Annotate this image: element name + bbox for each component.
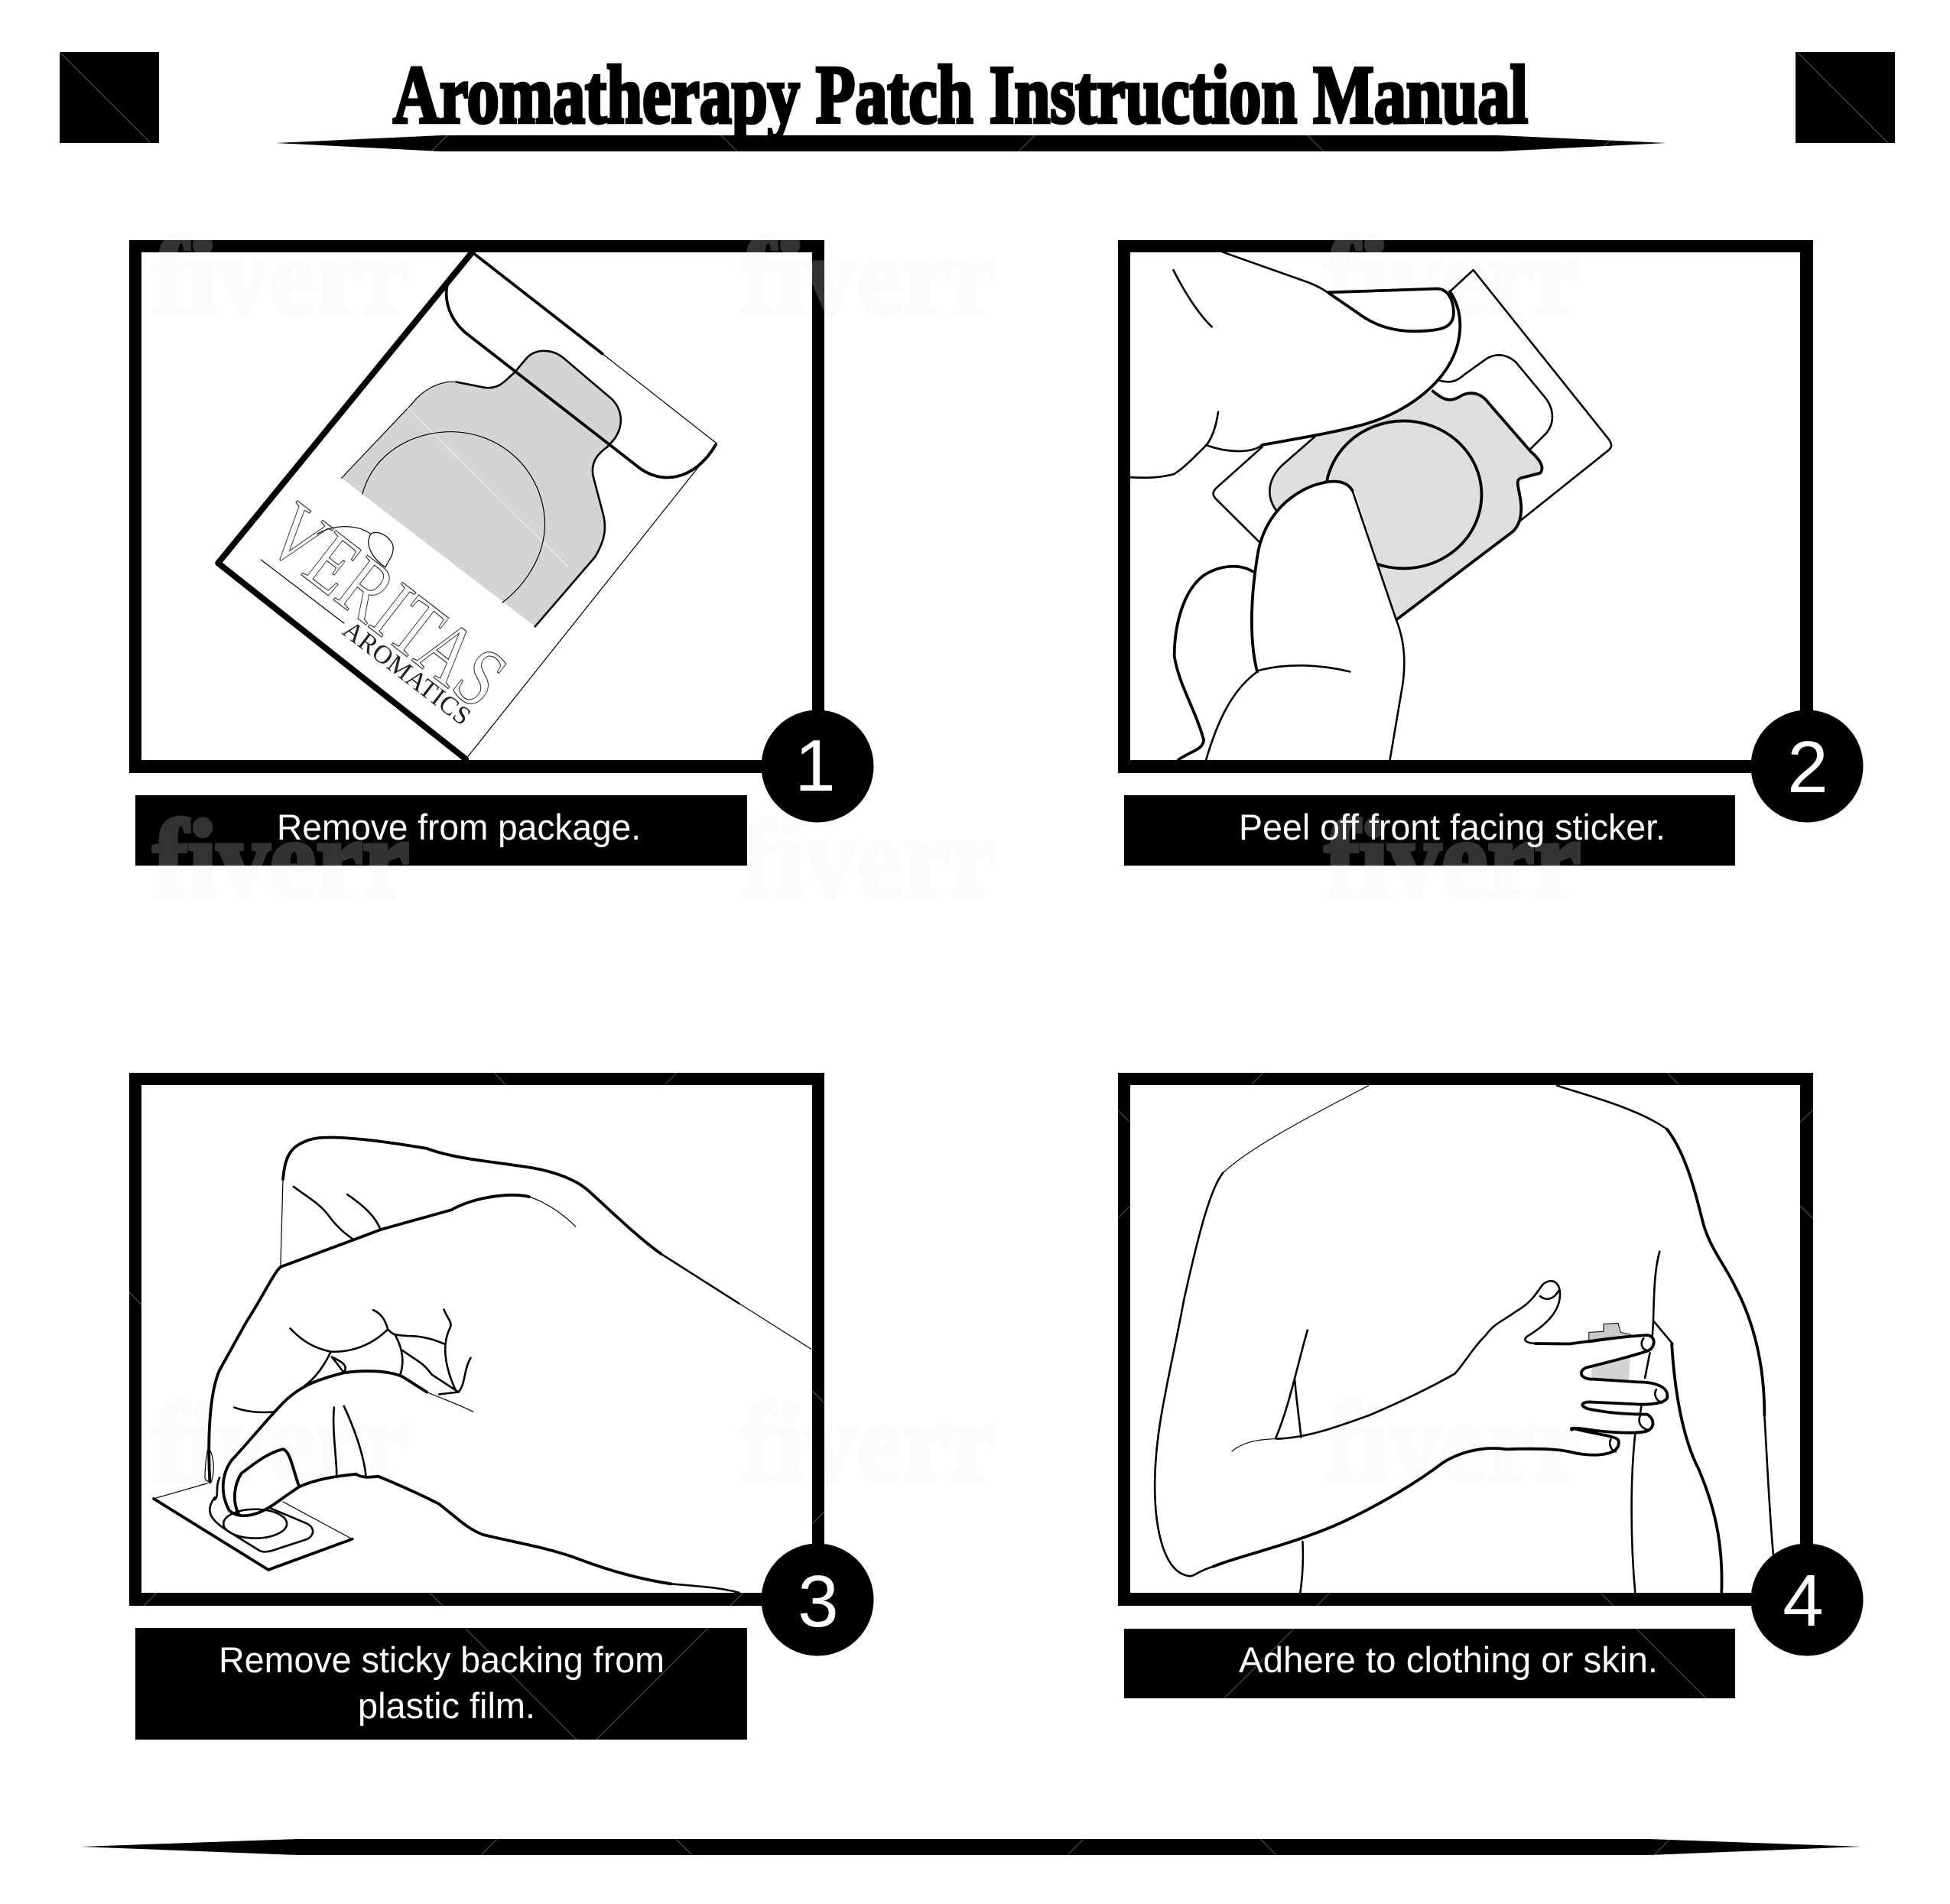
faint watermark on white: fiverr	[153, 1382, 409, 1504]
faint watermark on white: fiverr	[740, 798, 996, 921]
illustration: patch in package	[218, 252, 717, 759]
frame	[1118, 1073, 1813, 1606]
frame	[129, 240, 824, 773]
logo rule and leaf	[261, 527, 393, 623]
caption text 3	[219, 1639, 665, 1726]
header corner square left	[60, 52, 159, 143]
faint watermark on white: fiverr	[1324, 1382, 1581, 1504]
number 1: 1	[795, 725, 836, 807]
logo: Aromatics: AROMATICS	[337, 616, 476, 731]
watermark on black areas: fiverr	[153, 798, 409, 921]
panel 2: peel off sticker	[1118, 240, 1863, 866]
upper arm and hand	[1232, 1439, 1277, 1451]
plastic film	[154, 1483, 207, 1499]
package flap	[447, 275, 716, 477]
faint watermark on white	[153, 216, 1581, 1504]
faint watermark on white: fiverr	[740, 1382, 996, 1504]
number 3: 3	[798, 1561, 839, 1642]
illustration: fingers peeling sticker	[1130, 252, 1611, 760]
header corner square right	[1796, 52, 1895, 143]
number badge 2	[1751, 710, 1863, 823]
watermark on black areas: fiverr	[1324, 798, 1581, 921]
knuckle creases	[294, 1187, 381, 1240]
caption text 4: Adhere to clothing or skin.	[1239, 1639, 1658, 1680]
torso left	[1223, 1086, 1368, 1173]
header underline bar	[276, 135, 1666, 151]
number 4: 4	[1783, 1560, 1824, 1642]
fingers	[1536, 1335, 1667, 1433]
illustration: hand on plastic film	[154, 1137, 811, 1593]
caption bar	[1124, 795, 1735, 866]
patch shape	[342, 351, 621, 626]
panel 4: adhere to clothing or skin	[1118, 1073, 1863, 1698]
caption text 1: Remove from package.	[277, 807, 641, 847]
hand outline top	[281, 1179, 283, 1267]
number badge 3	[762, 1543, 873, 1656]
package outline	[218, 252, 472, 759]
patch	[1269, 391, 1542, 620]
watermark on black areas: fiverr	[153, 216, 409, 338]
number badge 1	[762, 710, 873, 823]
panel 3: remove sticky backing	[129, 1073, 873, 1740]
faint watermark on white: fiverr	[1324, 216, 1581, 338]
title: Aromatherapy Patch Instruction Manual	[393, 50, 1528, 141]
finger nail	[235, 1449, 299, 1515]
backing card	[1396, 270, 1611, 620]
caption bar	[135, 795, 747, 866]
finger creases	[234, 1406, 366, 1476]
illustration: torso with hand on patch	[1155, 1086, 1773, 1594]
finger nails	[1540, 1291, 1662, 1451]
caption text 2: Peel off front facing sticker.	[1239, 807, 1666, 847]
panel 1: remove from package	[129, 240, 873, 866]
faint watermark on white: fiverr	[153, 798, 409, 921]
faint watermark on white: fiverr	[153, 216, 409, 338]
other finger	[1175, 567, 1253, 760]
back of hand	[281, 1195, 529, 1267]
patch	[1589, 1323, 1633, 1343]
caption bar	[135, 1628, 747, 1740]
faint watermark on white: fiverr	[740, 216, 996, 338]
watermark on black areas: fiverr	[740, 216, 996, 338]
patch circle	[1325, 421, 1481, 568]
logo: Veritas: VERITAS	[251, 485, 524, 726]
caption bar	[1124, 1629, 1735, 1698]
lower thumb	[1206, 482, 1404, 760]
torso right	[1557, 1086, 1667, 1129]
watermark on black areas: fiverr	[1324, 216, 1581, 338]
index finger	[427, 1392, 473, 1412]
caption text 3: Remove sticky backing from	[219, 1639, 665, 1680]
patch on film	[210, 1497, 313, 1551]
caption text 3: plastic film.	[358, 1685, 535, 1726]
footer bar	[81, 1839, 1861, 1855]
number badge 4	[1751, 1543, 1863, 1656]
faint watermark on white: fiverr	[1324, 798, 1581, 921]
frame	[1118, 240, 1813, 773]
number 2: 2	[1787, 726, 1828, 808]
upper thumb	[1130, 252, 1460, 478]
frame	[129, 1073, 824, 1606]
